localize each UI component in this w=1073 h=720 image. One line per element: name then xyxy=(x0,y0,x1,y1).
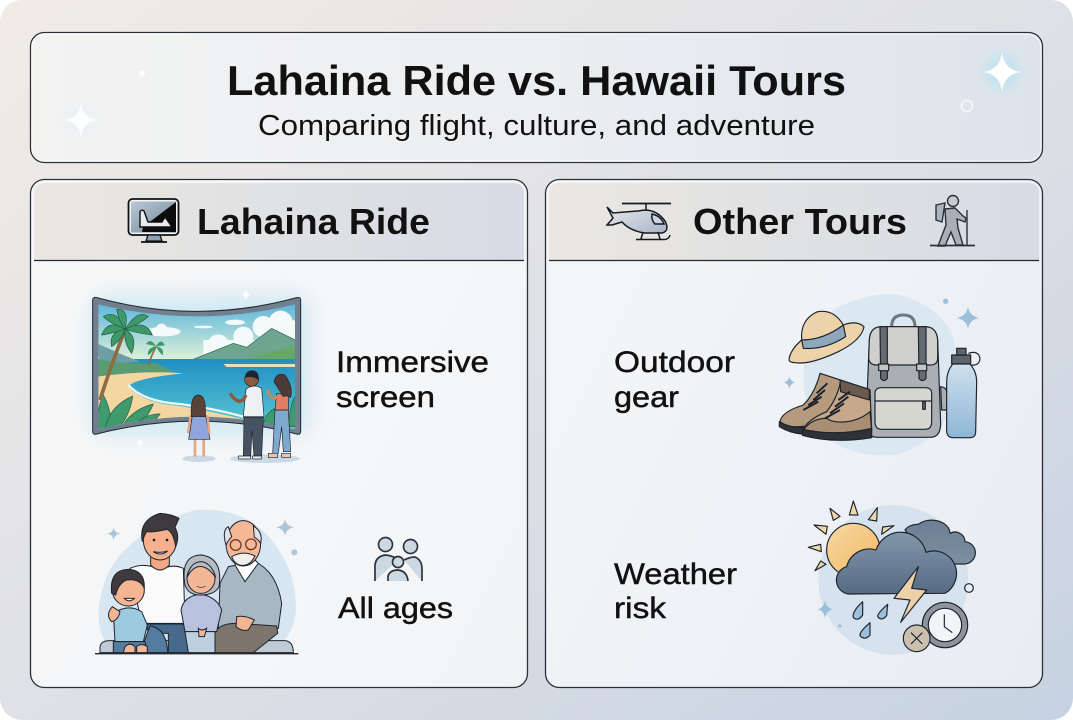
icon: small ring xyxy=(962,100,972,112)
label: Weather risk: Weather xyxy=(614,558,737,591)
figure: grandmother xyxy=(181,555,222,653)
label: Outdoor gear: Outdoor xyxy=(614,346,735,379)
icon: raindrops xyxy=(853,602,888,638)
icon: helicopter xyxy=(607,204,671,240)
label: Outdoor gear: gear xyxy=(614,381,679,414)
icon: sun xyxy=(808,501,894,577)
icon: small ring xyxy=(965,584,973,592)
label: Immersive screen: Immersive xyxy=(336,346,489,379)
figure: man xyxy=(230,371,300,463)
heading: Other Tours xyxy=(693,201,907,242)
icon: hat xyxy=(789,311,864,363)
illustration: weather risk xyxy=(808,501,975,655)
label: Weather risk xyxy=(614,558,737,625)
icon: monitor with seat xyxy=(128,199,178,242)
label: All ages: All ages xyxy=(338,592,453,625)
panel header xyxy=(549,183,1039,261)
panel: Lahaina Ride xyxy=(30,180,528,688)
icon: lightning xyxy=(894,567,927,622)
label: Immersive screen xyxy=(336,346,489,414)
illustration: outdoor gear xyxy=(779,294,980,456)
illustration: immersive screen xyxy=(90,289,310,463)
panel: Other Tours xyxy=(546,180,1042,688)
icon: sparkles xyxy=(135,289,251,448)
title panel xyxy=(30,32,1042,162)
figure: boy xyxy=(108,569,147,653)
icon: back cloud xyxy=(905,520,975,564)
icon: sparkle left xyxy=(64,103,98,138)
title: Lahaina Ride vs. Hawaii Tours xyxy=(227,57,846,104)
label: Outdoor gear xyxy=(614,346,735,414)
figure: grandfather xyxy=(213,521,282,653)
icon: backpack xyxy=(866,315,947,437)
heading: Lahaina Ride xyxy=(197,201,430,242)
label: Weather risk: risk xyxy=(614,592,667,625)
icon: small dot sparkle xyxy=(139,70,145,76)
subtitle: Comparing flight, culture, and adventure xyxy=(258,110,815,142)
illustration: family xyxy=(95,510,298,654)
figure: father xyxy=(130,513,197,653)
icon: main cloud xyxy=(836,532,957,594)
icon: hiker xyxy=(930,196,975,246)
icon: boots xyxy=(779,373,872,440)
icon: family group xyxy=(375,538,422,581)
icon: clock xyxy=(922,602,968,648)
figure: woman xyxy=(267,374,291,458)
icon: sparkle right xyxy=(983,52,1021,92)
icon: cancel badge xyxy=(903,625,930,652)
figure: girl xyxy=(182,395,216,462)
panel header xyxy=(34,183,524,261)
label: Immersive screen: screen xyxy=(336,381,435,414)
icon: bottle xyxy=(947,348,980,438)
